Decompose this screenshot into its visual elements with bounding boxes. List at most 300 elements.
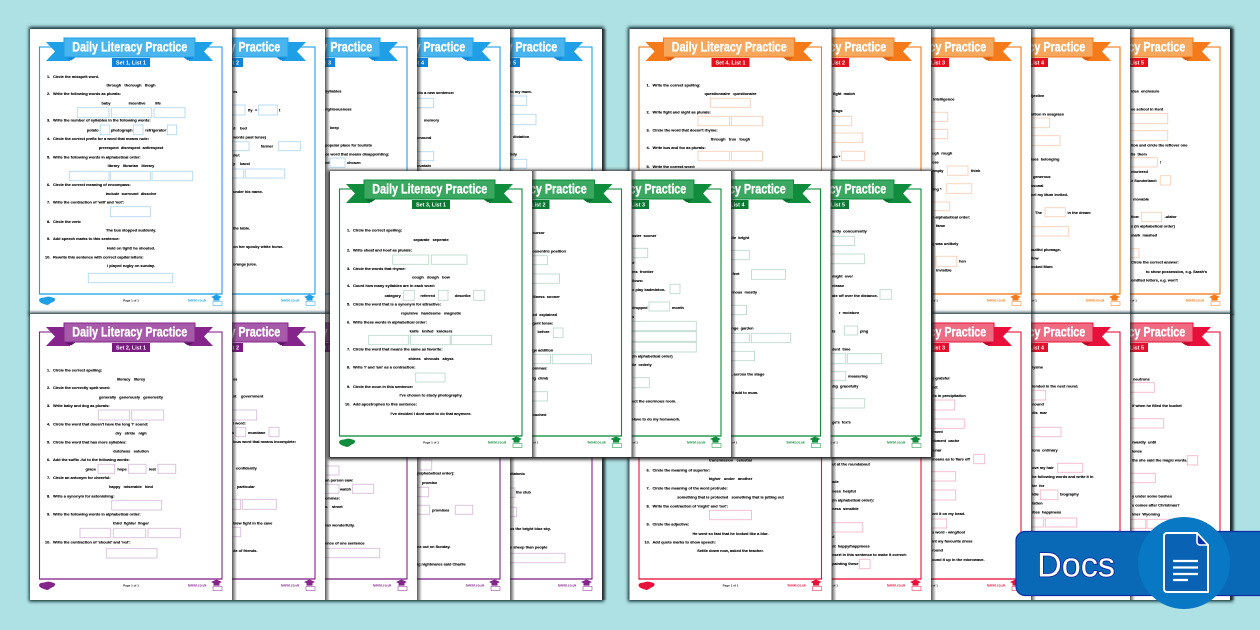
title: Daily Literacy Practice: [871, 325, 986, 340]
answer boxes: [819, 116, 865, 161]
questions: lysine: [1032, 365, 1044, 370]
questions: ths she said the magic words.: [1132, 457, 1187, 462]
questions: higher under another: [709, 476, 753, 481]
page: set 4 list 3: [829, 29, 1036, 315]
questions: [532, 230, 567, 417]
questions: der:: [233, 152, 240, 157]
list label: Set 1, List 5: [486, 61, 516, 67]
questions: 2.: [47, 385, 50, 390]
questions: bacci: [240, 161, 250, 166]
questions: 2.: [646, 109, 650, 114]
footer: twinkl.co.uk: [987, 298, 1005, 302]
footer: [401, 583, 484, 588]
questions: de of friends.: [233, 548, 257, 553]
questions: rwardly until: [1132, 440, 1156, 445]
list label: Set 4, List 4: [1014, 61, 1044, 67]
footer: twinkl.co.uk: [987, 583, 1005, 587]
questions: ommas:: [532, 366, 547, 371]
questions: 6.: [347, 320, 350, 325]
questions: (alphabetical order):: [417, 470, 454, 475]
questions: generous: [1033, 174, 1051, 179]
footer: Page 1 of 1: [308, 298, 324, 302]
questions: government: [241, 394, 264, 399]
questions: through thorough thogh: [106, 82, 156, 87]
questions: Circle the correct spelling:: [353, 227, 402, 232]
questions: referred: [420, 293, 436, 298]
questions: cursor: [532, 230, 545, 235]
questions: photograph: [111, 127, 133, 132]
questions: life: [155, 101, 162, 106]
questions: on her spooky white horse.: [233, 244, 283, 249]
footer: Page 1 of 1: [722, 440, 738, 444]
questions: 10.: [345, 401, 350, 406]
questions: [45, 74, 167, 268]
questions: [832, 228, 878, 424]
page: set 3 list 3: [529, 171, 736, 457]
questions: ts: [832, 328, 835, 333]
footer: Page 1 of 1: [216, 298, 232, 302]
answer boxes: [398, 98, 434, 161]
questions: dig gracefully: [832, 383, 859, 388]
questions: n alphabetical order:: [932, 214, 970, 219]
page: set 2 list 1: [30, 314, 237, 600]
answer boxes: [80, 410, 180, 558]
title: Daily Literacy Practice: [671, 182, 786, 197]
questions: [510, 89, 532, 157]
questions: Circle the correct meaning of encompass:: [53, 182, 131, 187]
questions: ent it on my head.: [932, 511, 965, 516]
questions: d: [832, 534, 835, 539]
questions: se school in Kent: [1131, 107, 1164, 112]
docs badge: [1016, 517, 1260, 609]
questions: , across the stage: [732, 372, 765, 377]
questions: [832, 91, 856, 159]
list label: Set 1, List 1: [116, 61, 146, 67]
answer boxes: [710, 510, 752, 520]
Docs label: Docs: [1037, 546, 1115, 584]
footer: [216, 583, 299, 588]
questions: int my favourite dress: [932, 539, 972, 544]
questions: bed: [240, 126, 248, 131]
questions: tidy: [510, 152, 518, 157]
answer boxes: [718, 250, 791, 361]
questions: righteousness: [325, 107, 352, 112]
footer: twinkl.co.uk: [1186, 298, 1204, 302]
questions: ect the enormous room.: [632, 398, 676, 403]
footer: twinkl.co.uk: [687, 440, 705, 444]
questions: promises: [432, 507, 449, 512]
answer boxes: [490, 96, 536, 168]
questions: potato: [87, 127, 99, 132]
questions: ommas:: [325, 495, 340, 500]
questions: ides enclosure: [1131, 88, 1160, 93]
footer: Page 1 of 1: [822, 440, 838, 444]
questions: farmer: [261, 143, 274, 148]
footer: [822, 583, 905, 588]
questions: Write the contraction of 'might' and 'not':: [652, 503, 728, 508]
questions: [232, 89, 283, 266]
footer: twinkl.co.uk: [786, 440, 805, 444]
questions: rment: [932, 429, 944, 434]
answer boxes: [520, 256, 592, 401]
questions: ce word that means disappointing:: [325, 152, 389, 157]
list label: Set 2, List 1: [116, 346, 146, 352]
footer: [922, 583, 1005, 588]
questions: refrigerator: [145, 127, 167, 132]
questions: 9.: [47, 236, 50, 241]
answer boxes: [919, 400, 985, 528]
questions: =: [255, 107, 258, 112]
list label: Set 4, List 3: [915, 61, 945, 67]
questions: 3.: [47, 118, 50, 123]
questions: e Sunderland:: [1131, 178, 1157, 183]
page: set 5 list 2: [729, 314, 936, 600]
stack shadow: [29, 27, 604, 315]
questions: antly concurrently: [832, 228, 868, 233]
questions: 8.: [47, 219, 50, 224]
questions: means as to flare off: [932, 456, 971, 461]
title: Daily Literacy Practice: [771, 182, 886, 197]
questions: painting these: [832, 561, 859, 566]
questions: third fighter finger: [113, 520, 149, 525]
questions: ms frontier: [632, 269, 654, 274]
questions: I've chosen to study photography.: [400, 393, 462, 398]
list label: Set 2, List 2: [209, 346, 239, 352]
questions: lence: [1132, 449, 1143, 454]
questions: ig climb: [532, 376, 549, 381]
questions: 8.: [347, 365, 350, 370]
footer: Page 1 of 1: [123, 298, 139, 302]
footer: Page 1 of 1: [401, 298, 417, 302]
questions: Write the correct word:: [652, 164, 695, 169]
footer: twinkl.co.uk: [887, 298, 905, 302]
questions: Have to do my homework.: [632, 416, 680, 421]
questions: [345, 227, 472, 416]
questions: d: [233, 126, 236, 131]
questions: Write the correct spelling:: [652, 82, 700, 87]
page: set 1 list 1: [30, 29, 237, 315]
questions: ooked Mum: [1031, 264, 1053, 269]
questions: Write a synonym for astonishing:: [53, 493, 115, 498]
footer: [123, 583, 206, 588]
questions: g was unlikely: [932, 241, 959, 246]
questions: 7.: [47, 475, 50, 480]
footer: [622, 440, 705, 444]
questions: [45, 368, 164, 544]
questions: nd:: [932, 384, 938, 389]
list label: Set 5, List 1: [716, 346, 745, 352]
questions: ises belonging: [1031, 156, 1060, 161]
questions: Circle the word that is a synonym for attractive:: [353, 301, 441, 306]
list label: Set 1, List 4: [394, 61, 424, 67]
questions: describe: [455, 293, 472, 298]
questions: [510, 471, 551, 549]
answer boxes: [698, 98, 762, 161]
answer boxes: [330, 158, 345, 167]
footer: Page 1 of 1: [622, 440, 638, 444]
page: set 4 list 1: [630, 29, 836, 315]
page: set 2 list 5: [400, 314, 607, 600]
questions: -ulator: [1164, 214, 1177, 219]
title: Daily Literacy Practice: [165, 40, 280, 55]
questions: literacy litercy: [117, 377, 146, 382]
footer: [423, 440, 506, 444]
questions: 7.: [347, 346, 350, 351]
footer: twinkl.co.uk: [887, 583, 905, 587]
questions: fly: [248, 107, 253, 112]
questions: Circle the correct answer:: [1131, 260, 1179, 265]
questions: 9.: [47, 512, 50, 517]
title: Daily Literacy Practice: [771, 325, 886, 340]
questions: ouched: [532, 412, 547, 417]
questions: 6.: [47, 182, 50, 187]
title: Daily Literacy Practice: [350, 325, 465, 340]
questions: Circle the words that rhyme:: [353, 266, 406, 271]
questions: 10.: [644, 539, 650, 544]
questions: Circle the word that doesn't have the long 'i' sound:: [53, 421, 148, 426]
questions: d: [632, 260, 635, 265]
page: set 5 list 3: [829, 314, 1036, 600]
questions: autiful plumage.: [1031, 247, 1061, 252]
questions: street: [332, 504, 343, 509]
footer: twinkl.co.uk: [188, 583, 206, 587]
footer: [523, 440, 606, 444]
stack shadow: [628, 27, 1233, 315]
questions: ss the bright blue sky.: [510, 526, 551, 531]
questions: ter for: [1032, 483, 1045, 488]
questions: might over: [832, 274, 853, 279]
questions: llow: [1031, 255, 1040, 260]
questions: tation: [1032, 501, 1043, 506]
questions: Circle the verb:: [53, 219, 81, 224]
answer boxes: [819, 523, 870, 569]
questions: Circle the word that means the same as favorite:: [353, 346, 443, 351]
questions: particular: [237, 484, 255, 489]
questions: 1.: [347, 227, 350, 232]
questions: rnous mostly: [732, 289, 758, 294]
questions: 3.: [47, 403, 50, 408]
title: Daily Literacy Practice: [257, 325, 372, 340]
list label: Set 1, List 2: [209, 61, 239, 67]
questions: 7.: [47, 200, 50, 205]
questions: es: [233, 89, 237, 94]
questions: transmission celestial: [709, 457, 752, 462]
questions: ris in precipitation: [932, 393, 966, 398]
questions: aid *: [832, 154, 841, 159]
questions: diatonic: [510, 471, 526, 476]
questions: prerespect disrespect antirespect: [99, 145, 164, 150]
footer: twinkl.co.uk: [788, 583, 806, 587]
questions: think: [971, 168, 981, 173]
questions: lmer Wyoming: [1132, 511, 1160, 516]
questions: he following words and write it in: [1032, 474, 1094, 479]
footer: Page 1 of 1: [523, 440, 539, 444]
title: Daily Literacy Practice: [72, 40, 187, 55]
questions: ut at the roundabout: [832, 462, 871, 467]
questions: [932, 97, 981, 273]
footer: [723, 298, 806, 302]
page: set 5 list 4: [928, 314, 1135, 600]
questions: 10.: [45, 254, 50, 259]
answer boxes: [398, 460, 473, 514]
questions: ities happiness: [1032, 510, 1061, 515]
questions: memory: [424, 117, 440, 122]
questions: Write the following words as plurals:: [53, 91, 121, 96]
questions: ose: [932, 159, 940, 164]
questions: illness sooner: [532, 294, 560, 299]
questions: l word:: [233, 421, 246, 426]
page: set 5 list 1: [630, 314, 836, 600]
questions: [232, 376, 296, 553]
questions: before: [538, 329, 550, 334]
worksheet stack: orange set 4: [628, 27, 1235, 315]
questions: s.: [325, 504, 328, 509]
badge circle: [1138, 517, 1230, 609]
questions: s: [232, 430, 234, 435]
footer: [1021, 298, 1104, 302]
questions: 6.: [47, 457, 50, 462]
questions: 2.: [347, 248, 350, 253]
questions: 6.: [646, 467, 650, 472]
questions: dis mar: [1032, 410, 1047, 415]
stack shadow: [328, 170, 933, 460]
questions: orange juice.: [233, 261, 257, 266]
questions: include surround dissolve: [106, 191, 157, 196]
questions: separate seperate: [413, 237, 449, 242]
questions: fame: [936, 223, 946, 228]
worksheet stack: blue set 1: [29, 27, 607, 315]
questions: The bus stopped suddenly.: [106, 228, 156, 233]
footer: Page 1 of 1: [423, 440, 439, 444]
footer: Page 1 of 1: [922, 298, 938, 302]
questions: 5.: [347, 301, 350, 306]
questions: t: [279, 107, 281, 112]
answer boxes: [369, 255, 492, 382]
questions: [417, 470, 466, 567]
questions: i played rugby on sunday.: [107, 263, 155, 268]
footer: [822, 440, 905, 444]
questions: Circle the word that doesn't rhyme:: [652, 128, 718, 133]
questions: Circle the correct spelling:: [53, 368, 102, 373]
questions: Circle the misspelt word.: [53, 74, 99, 79]
answer boxes: [213, 105, 300, 178]
page: set 1 list 3: [215, 29, 422, 315]
questions: 1.: [47, 368, 50, 373]
questions: 9.: [347, 384, 350, 389]
title: Daily Literacy Practice: [1070, 40, 1185, 55]
questions: something that is protected something that is jutting out: [677, 494, 784, 499]
questions: 1.: [47, 74, 50, 79]
questions: 2.: [47, 91, 50, 96]
questions: Circle an antonym for cheerful:: [53, 475, 111, 480]
footer: [401, 298, 484, 302]
footer: [1121, 298, 1204, 302]
page: set 3 list 4: [628, 171, 836, 457]
questions: Write the following words in alphabetical order:: [53, 154, 141, 159]
page: set 3 list 2: [430, 171, 636, 457]
questions: ling *: [932, 186, 942, 191]
footer: [1121, 583, 1204, 588]
questions: 10.: [45, 539, 50, 544]
title: Daily Literacy Practice: [442, 325, 557, 340]
questions: mark mashed: [1131, 232, 1158, 237]
questions: y: [233, 161, 236, 166]
questions: 8.: [646, 503, 650, 508]
questions: 7.: [646, 485, 650, 490]
questions: Rewrite this sentence with correct capital letters:: [53, 254, 144, 259]
page: set 4 list 2: [729, 29, 936, 315]
questions: blew tight in the cave: [233, 520, 273, 525]
questions: fight match: [833, 91, 856, 96]
questions: 5.: [47, 154, 50, 159]
title: Daily Literacy Practice: [257, 40, 372, 55]
questions: the table.: [233, 226, 250, 231]
title: Daily Literacy Practice: [970, 325, 1085, 340]
title: Daily Literacy Practice: [571, 182, 686, 197]
list label: Set 1, List 3: [301, 61, 331, 67]
footer: [123, 298, 206, 302]
page: set 3 list 1: [330, 171, 537, 457]
list label: Set 5, List 3: [915, 346, 945, 352]
questions: confidently: [236, 466, 258, 471]
questions: neutrons: [1133, 376, 1150, 381]
title: Daily Literacy Practice: [372, 182, 487, 197]
questions: tion:: [1131, 214, 1139, 219]
footer: [308, 298, 391, 302]
questions: intelligence: [933, 97, 955, 102]
questions: ugh rough: [932, 151, 953, 156]
answer boxes: [1018, 390, 1083, 527]
questions: rest: [149, 467, 157, 472]
footer: Page 1 of 1: [216, 584, 232, 588]
questions: Add apostrophes to this sentence:: [353, 401, 417, 406]
list label: Set 2, List 3: [301, 346, 331, 352]
questions: 3.: [646, 128, 650, 133]
footer: twinkl.co.uk: [373, 583, 391, 587]
questions: nt happy/happiness: [832, 543, 870, 548]
questions: 4.: [646, 145, 650, 150]
questions: keep: [330, 125, 339, 130]
questions: ossentric position: [532, 249, 567, 254]
questions: gent tense:: [532, 321, 553, 326]
footer: [493, 298, 576, 302]
questions: an person saw:: [325, 477, 353, 482]
questions: [325, 88, 389, 165]
questions: aster sooner: [632, 233, 657, 238]
questions: ence of one sentence: [325, 541, 365, 546]
page: set 1 list 5: [400, 29, 607, 315]
questions: Add quote marks to show speech:: [652, 539, 716, 544]
footer: twinkl.co.uk: [887, 440, 905, 444]
page: set 4 list 4: [928, 29, 1135, 315]
list label: Set 2, List 4: [394, 346, 424, 352]
questions: dent time: [832, 346, 851, 351]
questions: to show possession, e.g. Sarah's: [1146, 269, 1207, 274]
questions: Write the contraction of 'will' and 'not':: [53, 200, 124, 205]
footer: twinkl.co.uk: [1086, 298, 1104, 302]
questions: ade: [832, 479, 840, 484]
page: set 5 list 5: [1028, 314, 1235, 600]
questions: dry stride nigh: [115, 430, 147, 435]
questions: Write these words in alphabetical order:: [353, 320, 427, 325]
footer: [922, 298, 1005, 302]
questions: [325, 477, 365, 546]
questions: Circle the adjective:: [652, 521, 689, 526]
page: set 2 list 4: [308, 314, 515, 600]
questions: under his name.: [233, 189, 263, 194]
title: Daily Literacy Practice: [771, 40, 886, 55]
footer: Page 1 of 1: [922, 584, 938, 588]
